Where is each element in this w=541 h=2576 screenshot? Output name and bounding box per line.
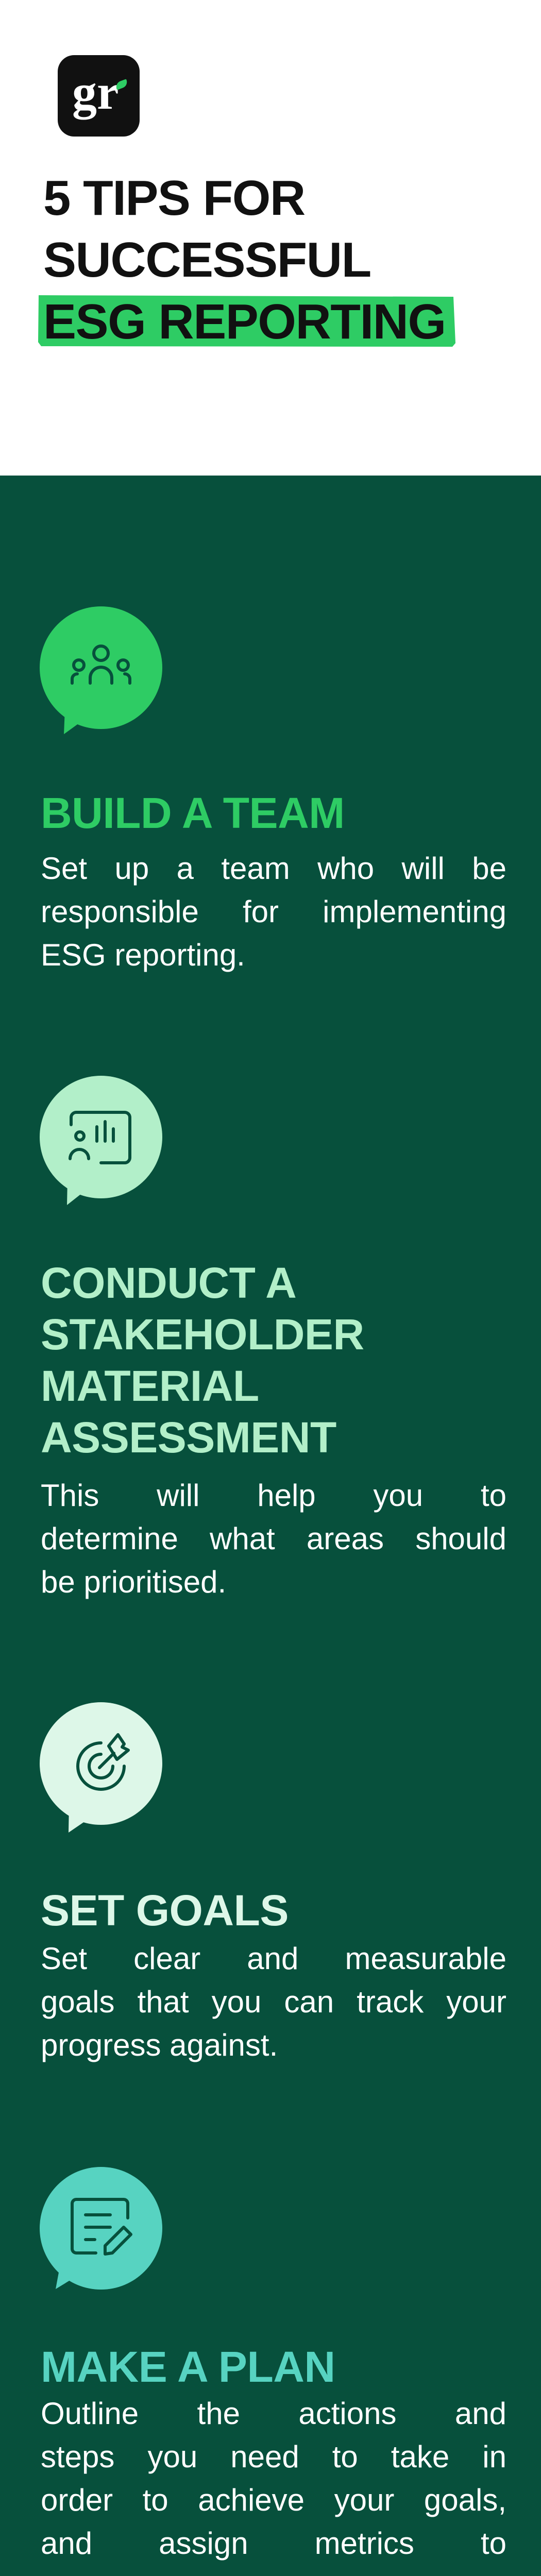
logo: gr app icon: gr	[72, 64, 119, 120]
title: SUCCESSFUL	[43, 232, 371, 287]
body text: determine what areas should	[41, 1521, 506, 1556]
title: ESG REPORTING	[43, 294, 446, 349]
body text	[41, 1941, 506, 2062]
body text: Set up a team who will be	[41, 851, 506, 886]
body text: Outline the actions and	[41, 2396, 506, 2431]
icon: target bubble	[40, 1702, 162, 1833]
heading: CONDUCT A	[41, 1259, 296, 1307]
title highlight	[38, 295, 455, 347]
panel: stakeholder assessment	[40, 1076, 506, 1599]
icon: document edit bubble	[40, 2167, 162, 2290]
panel: make a plan	[40, 2167, 506, 2576]
heading	[41, 1259, 364, 1462]
body text: and assign metrics to	[41, 2526, 506, 2561]
body text: be prioritised.	[41, 1565, 226, 1599]
heading: STAKEHOLDER	[41, 1310, 364, 1359]
body text: ESG reporting.	[41, 938, 245, 972]
heading: SET GOALS	[41, 1886, 289, 1935]
panel: build a team	[40, 606, 506, 972]
body text: This will help you to	[41, 1478, 506, 1513]
heading: BUILD A TEAM	[41, 789, 345, 837]
icon: team bubble	[40, 606, 162, 734]
body text: steps you need to take in	[41, 2439, 506, 2474]
heading: MATERIAL	[41, 1362, 259, 1410]
title	[43, 171, 446, 349]
body text: Set clear and measurable	[41, 1941, 506, 1976]
panel: set goals	[40, 1702, 506, 2062]
icon: presentation bubble	[40, 1076, 162, 1205]
body text	[41, 851, 506, 972]
body text: goals that you can track your	[41, 1985, 506, 2019]
body text: progress against.	[41, 2028, 278, 2062]
heading: MAKE A PLAN	[41, 2343, 335, 2391]
body text: order to achieve your goals,	[41, 2483, 506, 2517]
body text: responsible for implementing	[41, 894, 506, 929]
body text	[41, 1478, 506, 1599]
logo: gr app icon	[58, 55, 140, 137]
title: 5 TIPS FOR	[43, 171, 305, 226]
heading: ASSESSMENT	[41, 1413, 336, 1462]
body text	[41, 2396, 506, 2576]
